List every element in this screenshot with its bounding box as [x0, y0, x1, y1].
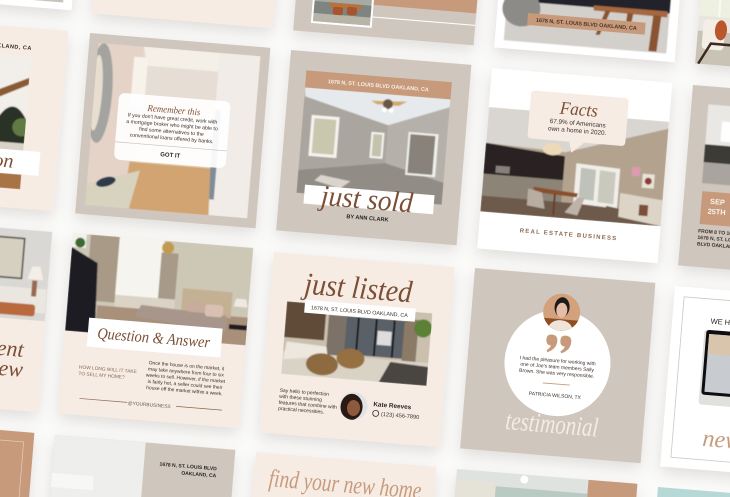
script title: just sold: [316, 180, 415, 219]
business handle: [79, 397, 222, 414]
client avatar: [543, 294, 580, 331]
card: we have a new website: [660, 286, 730, 487]
answer text: may take anywhere from four to six: [148, 366, 225, 379]
bedroom photo: [281, 301, 434, 386]
testimonial text: Brown. She was very responsible.: [519, 368, 594, 380]
testimonial text: I had the pleasure for working with: [519, 355, 596, 367]
card: bottom-left tan post: [0, 418, 34, 497]
white title band: [0, 139, 40, 176]
card: bottom-right teal post: [655, 487, 730, 497]
quotation mark icon: [545, 334, 572, 354]
dialog box: GOT IT: [160, 152, 181, 160]
card: bottom address post: [47, 435, 235, 497]
card: just sold: [276, 50, 471, 251]
client name: PATRICIA WILSON, TX: [529, 391, 582, 401]
card: just listed: [259, 252, 454, 453]
monitor mockup: [698, 330, 730, 414]
agent name: Kate Reeves: [373, 401, 412, 411]
address label: [527, 13, 646, 35]
body text: features that combine with: [278, 400, 337, 411]
living room photo: [0, 217, 52, 322]
empty bedroom photo: [296, 87, 451, 205]
bright room photo: [48, 435, 146, 497]
dialog box: Remember this: [146, 104, 201, 118]
event details: [697, 228, 730, 251]
white circle: [500, 306, 615, 420]
business handle: @YOURBUSINESS: [127, 401, 171, 410]
white title band: [87, 318, 223, 357]
answer text: [145, 360, 227, 397]
answer text: weeks to sell. However, if the market: [146, 372, 226, 385]
address label: 1678 N, ST. LOUIS BLVD OAKLAND, CA: [536, 18, 637, 32]
dialog box: conventional loans offered by banks.: [129, 132, 214, 145]
address text: 1678 N, ST. LOUIS BLVD: [159, 462, 217, 472]
question text: HOW LONG WILL IT TAKE: [79, 364, 137, 375]
kitchen photo: [480, 107, 670, 226]
body text: practical necessities.: [278, 406, 324, 416]
phone contact: (123) 456-7890: [381, 412, 419, 421]
framed living room photo: [311, 0, 377, 28]
tan header band: [373, 0, 479, 13]
card: left cream post: [0, 16, 68, 217]
white title band: [303, 185, 435, 214]
dialog box: [114, 93, 231, 169]
date badge: [700, 191, 730, 228]
body text: with these stunning: [279, 394, 322, 403]
testimonial text: one of Joe's team members Sally: [520, 362, 595, 374]
card: bottom room photo: [452, 469, 637, 497]
address band: 1678 N, ST. LOUIS BLVD OAKLAND, CA: [328, 79, 429, 93]
footer text: REAL ESTATE BUSINESS: [519, 228, 618, 242]
script title: just listed: [300, 265, 414, 309]
question text: [78, 364, 137, 382]
date badge: SEP: [710, 197, 725, 207]
dialog box: a mortgage broker who might be able to: [126, 119, 218, 132]
question text: TO SELL MY HOME?: [78, 371, 125, 381]
bedroom photo: [65, 233, 262, 346]
address text: [159, 462, 217, 479]
speech bubble: own a home in 2020.: [548, 125, 607, 137]
date badge: 25TH: [707, 207, 726, 217]
card: top white post with rug photo: [494, 0, 689, 68]
speech bubble: [526, 90, 629, 157]
card: question and answer: [58, 233, 262, 435]
answer text: is fairly hot, a seller could see their: [147, 379, 223, 391]
card: top-left white post: [0, 0, 86, 16]
dialog box: If you don't have great credit, work with: [127, 112, 218, 126]
address text: OAKLAND, CA: [181, 470, 217, 479]
byline: BY ANN CLARK: [346, 214, 389, 224]
dialog box: find some alternatives to the: [139, 127, 204, 138]
body text: Say hello to perfection: [279, 388, 329, 398]
card: top taupe post with framed photo: [293, 0, 488, 51]
living room photo: [0, 77, 30, 190]
address band: [305, 70, 452, 100]
testimonial text: [518, 355, 596, 380]
hallway photo: [79, 42, 261, 219]
phone contact: [372, 410, 419, 421]
card: top cream post: [92, 0, 287, 34]
answer text: Once the house is on the market, it: [148, 360, 225, 372]
agent avatar: [340, 392, 368, 420]
speech bubble: Facts: [558, 98, 599, 121]
card: remember this tip: [75, 33, 270, 234]
card: apartment review: [0, 217, 52, 418]
event photo: [702, 104, 730, 195]
card: sep 25th event: [678, 85, 730, 286]
address label: [304, 300, 416, 322]
script title: testimonial: [504, 405, 600, 443]
card: facts: [477, 68, 673, 269]
card: testimonial: [460, 268, 655, 469]
speech bubble: 67.9% of Americans: [550, 118, 606, 129]
rug photo: [500, 0, 672, 54]
card: find your new home: [250, 452, 436, 497]
address label: 1678 N, ST. LOUIS BLVD OAKLAND, CA: [311, 305, 408, 319]
white title band: Question & Answer: [97, 325, 211, 352]
card: top-right interior photo: [695, 0, 730, 84]
answer text: house off the market within a week.: [146, 385, 223, 397]
body text: [278, 388, 338, 417]
